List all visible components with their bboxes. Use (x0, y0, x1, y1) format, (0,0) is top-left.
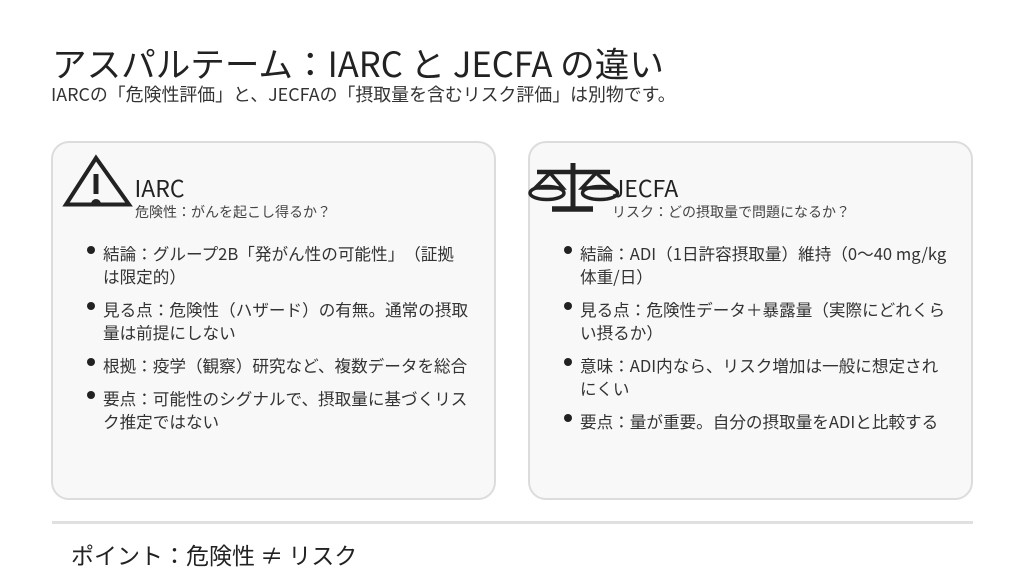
JECFA bullets: 結論：ADI（1日許容摂取量）維持（0〜40 mg/kg (580, 241, 946, 265)
icon: warning triangle (62, 154, 133, 206)
IARC bullets: 結論：グループ2B「発がん性の可能性」（証拠 (103, 241, 454, 265)
IARC bullets: は限定的） (103, 264, 186, 288)
IARC bullets: ク推定ではない (103, 409, 219, 433)
JECFA subheading: リスク：どの摂取量で問題になるか？ (612, 202, 850, 222)
title: アスパルテーム：IARC と JECFA の違い (52, 37, 664, 87)
icon: balance scale (528, 163, 620, 212)
IARC bullets: 見る点：危険性（ハザード）の有無。通常の摂取 (103, 297, 468, 321)
JECFA heading: JECFA (612, 170, 678, 204)
JECFA bullets: い摂るか） (580, 320, 663, 344)
JECFA bullets: にくい (580, 376, 629, 400)
JECFA bullets: 体重/日） (580, 264, 653, 288)
panel: JECFA (528, 141, 973, 500)
IARC bullets: 要点：可能性のシグナルで、摂取量に基づくリス (103, 386, 467, 410)
panel: IARC (51, 141, 496, 500)
JECFA bullets: 見る点：危険性データ＋暴露量（実際にどれくら (580, 297, 945, 321)
JECFA bullets (564, 241, 946, 433)
IARC bullets: 量は前提にしない (103, 320, 236, 344)
JECFA bullets: 要点：量が重要。自分の摂取量をADIと比較する (580, 409, 938, 433)
IARC heading: IARC (134, 170, 185, 204)
subtitle: IARCの「危険性評価」と、JECFAの「摂取量を含むリスク評価」は別物です。 (51, 81, 676, 107)
key point: ポイント：危険性 ≠ リスク (71, 537, 357, 571)
IARC subheading: 危険性：がんを起こし得るか？ (135, 202, 331, 222)
JECFA bullets: 意味：ADI内なら、リスク増加は一般に想定され (580, 353, 938, 377)
IARC bullets (87, 241, 468, 433)
IARC bullets: 根拠：疫学（観察）研究など、複数データを総合 (103, 353, 467, 377)
